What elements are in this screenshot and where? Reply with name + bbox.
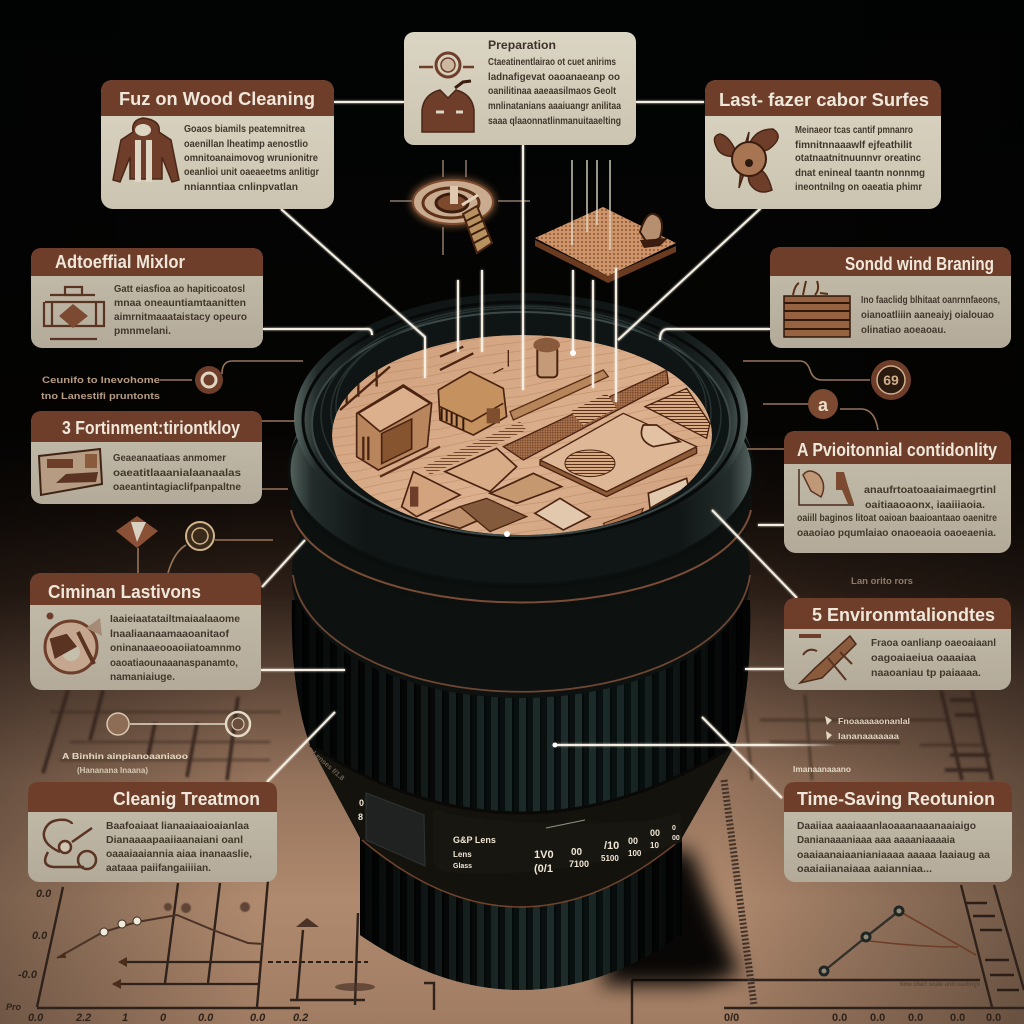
caption: right chart: Fnoaaaaaonanlal: [838, 717, 910, 726]
background chart: upper blurred grid: [43, 690, 992, 780]
axis labels: 2.2: [75, 1012, 91, 1024]
body text: [110, 613, 241, 683]
icon: large coin: [871, 360, 911, 400]
panel: preparation: [404, 32, 636, 145]
body text: [797, 484, 997, 539]
line chart right: [632, 780, 1024, 1024]
body text: aataaa paiifangaiiiian.: [106, 862, 211, 874]
body text: Meinaeor tcas cantif pmnanro: [795, 124, 913, 136]
ribbed grip: [292, 600, 750, 812]
axis labels: 0.0: [832, 1012, 847, 1024]
panel: ciminan lastivons: [30, 573, 261, 690]
band text: Glass: [453, 863, 472, 870]
panel: cleaning treatment: [28, 782, 277, 882]
body text: ineontnilng on oaeatia phimr: [795, 181, 922, 193]
body text: mnaa oneauntiamtaanitten: [114, 297, 246, 309]
axis labels: 0.0: [986, 1012, 1001, 1024]
icon: large coin: 69: [883, 372, 899, 388]
axis labels: [724, 1012, 1001, 1024]
floating icon: wood ring and screw: [390, 160, 530, 255]
panel: 3 fortinment: [31, 411, 262, 504]
icon: small coin: a: [818, 395, 829, 415]
heading: Time-Saving Reotunion: [797, 789, 995, 809]
floating icon: wooden board: [535, 207, 676, 283]
icon: propeller: [714, 129, 778, 192]
caption: left chart: [62, 752, 188, 775]
heading: 3 Fortinment:tiriontkloy: [62, 418, 240, 438]
lens inner wood scene: [332, 335, 712, 535]
body text: nnianntiaa cnlinpvatlan: [184, 181, 298, 193]
axis labels: Pro: [6, 1002, 22, 1012]
body text: oaaiaiianaiaaa aaianniaa...: [797, 863, 932, 875]
body text: oaaaiaaiannia aiaa inanaaslie,: [106, 848, 252, 860]
barrel rings: [292, 442, 750, 698]
heading: Preparation: [488, 38, 556, 52]
axis labels: 0.0: [28, 1012, 44, 1024]
band text: 100: [628, 849, 642, 858]
panel: sandd wind braning: [770, 247, 1011, 348]
caption: right chart: Iananaaaaaaa: [838, 732, 900, 741]
upper barrel: [292, 455, 750, 705]
body text: naaoaniau tp paiaaaa.: [871, 667, 981, 679]
band text: 0: [359, 798, 364, 808]
icon: control card: [39, 449, 102, 495]
body text: pmnmelani.: [114, 325, 171, 337]
body text: Fraoa oanlianp oaeoaiaanl: [871, 637, 996, 649]
axis labels: -0.0: [18, 969, 38, 981]
axis labels: 1: [122, 1012, 128, 1024]
body text: [184, 123, 319, 193]
callout: left caption: Ceunifo to lnevohome: [42, 375, 160, 386]
caption: left chart: A Binhin ainpianoaaniaoo: [62, 752, 188, 761]
axis labels: 0.0: [32, 930, 48, 942]
band text: 0: [672, 825, 676, 832]
band text: 00: [628, 836, 638, 846]
panel: additional mixer: [31, 248, 263, 348]
body text: Iaaieiaatatailtmaiaalaaome: [110, 613, 240, 625]
band text: /10: [604, 840, 619, 852]
icon: cleaning tool: [44, 820, 96, 869]
lens printed band: Lenses f/1.8: [311, 750, 345, 782]
body text: oaoatiaounaaanaspanamto,: [110, 657, 238, 669]
body text: Ctaeatinentlairao ot cuet anirims: [488, 56, 616, 68]
icon: target connector: [107, 712, 250, 736]
body text: aimrnitmaaataistacy opeuro: [114, 311, 247, 323]
caption: right chart: Imanaanaaano: [793, 765, 851, 774]
body text: fimnitnnaaawlf ejfeathilit: [795, 139, 912, 151]
body text: Baafoaiaat lianaaiaaioaianlaa: [106, 820, 249, 832]
body text: oagoaiaeiua oaaaiaa: [871, 652, 976, 664]
planks: [503, 370, 668, 460]
icon: tools: [799, 469, 854, 505]
body text: Goaos biamils peatemnitrea: [184, 123, 305, 135]
body text: oaaiaanaiaanianiaaaa aaaaa laaiaug aa: [797, 849, 990, 861]
body text: [488, 56, 621, 127]
axis labels: 0.0: [250, 1012, 266, 1024]
panel: last-fazer cabor surfes: [705, 80, 941, 209]
axis labels: [6, 888, 308, 1024]
body text: oaeantintagiaclifpanpaltne: [113, 481, 241, 493]
heading: A Pvioitonnial contidonlity: [797, 440, 997, 460]
wooden cabinet: [357, 385, 440, 477]
axis labels: 0.0: [870, 1012, 885, 1024]
panel: fuz on wood cleaning: [101, 80, 334, 209]
body text: anaufrtoatoaaiaimaegrtinl: [864, 484, 996, 496]
band text: 5100: [601, 854, 619, 863]
heading: Last- fazer cabor Surfes: [719, 90, 929, 110]
switch: [366, 793, 425, 866]
icon: chisel and tool: [799, 636, 856, 683]
top rim: [294, 293, 748, 543]
connector lines: [261, 102, 835, 798]
axis labels: 0: [160, 1012, 167, 1024]
band text: 00: [571, 847, 583, 858]
axis labels: 0.2: [293, 1012, 308, 1024]
band text: 00: [672, 835, 680, 842]
body text: oaaoiao pqumlaiao onaoeaoia oaoeaenia.: [797, 527, 996, 539]
heading: Cleanig Treatmon: [113, 789, 260, 809]
icon: layered wood with smoke: [784, 281, 850, 337]
big board: [540, 413, 697, 497]
body text: oianoatliiin aaneaiyj oialouao: [861, 309, 994, 321]
body text: mnlinatanians aaaiuangr anilitaa: [488, 100, 621, 112]
band text: G&P Lens: [453, 835, 496, 845]
panel: 5 environmental conditions: [784, 598, 1011, 690]
icon: diamond badge: [116, 516, 158, 573]
body text: [797, 820, 990, 875]
icon: small coin: [808, 389, 838, 419]
lens shadow: [600, 850, 740, 985]
caption: right chart: [793, 716, 910, 774]
body text: Geaeanaatiaas anmomer: [113, 452, 226, 464]
axis labels: 0.0: [950, 1012, 965, 1024]
caption: left chart: (Hananana lnaana): [77, 766, 148, 775]
body text: [113, 452, 241, 493]
heading: 5 Environmtaliondtes: [812, 605, 995, 625]
callout: left caption: [41, 361, 303, 402]
heading: Adtoeffial Mixlor: [55, 252, 185, 272]
body text: Danianaaaniaaa aaa aaaaniaaaaia: [797, 834, 955, 846]
lower ribbed barrel: [360, 838, 682, 990]
body text: lnaaliaanaamaaoanitaof: [110, 628, 230, 640]
panel: a environmental conductivity: [784, 431, 1011, 553]
body text: [861, 294, 1000, 336]
body text: ladnafigevat oaoanaeanp oo: [488, 71, 620, 83]
callout: left caption: tno Lanestifi pruntonts: [41, 391, 160, 402]
line chart right: time chart scale and readings: [900, 982, 981, 988]
body text: otatnaatnitnuunnvr oreatinc: [795, 152, 921, 164]
axis labels: 0.0: [198, 1012, 214, 1024]
band text: 7100: [569, 859, 589, 869]
icon: gold coin: [168, 522, 273, 573]
line chart left: [6, 880, 434, 1024]
axis labels: 0.0: [908, 1012, 923, 1024]
heading: Ciminan Lastivons: [48, 582, 201, 602]
body text: oaeatitlaaanialaanaalas: [113, 467, 241, 479]
control panel: [433, 810, 682, 873]
band text: 10: [650, 841, 659, 850]
body text: [106, 820, 252, 874]
body text: oaitiaaoaonx, iaaiiiaoia.: [865, 499, 985, 511]
band text: Lens: [453, 850, 472, 859]
flange: [289, 347, 753, 583]
heading: Fuz on Wood Cleaning: [119, 89, 315, 109]
body text: saaa qlaaonnatlinmanuitaaelting: [488, 115, 621, 127]
focus band: [310, 745, 735, 906]
icon: swirl coin: [195, 366, 223, 394]
body text: oeanlioi unit oaeaeetms anlitigr: [184, 166, 319, 178]
body text: dnat enineal taantn nonnmg: [795, 167, 925, 179]
callout: right coin badges: [743, 360, 911, 430]
data points: [100, 917, 141, 936]
icon: tool wheel: [45, 612, 102, 673]
body text: [795, 124, 925, 193]
body text: namaniaiuge.: [110, 671, 175, 683]
cup: [533, 338, 560, 377]
band text: 8: [358, 812, 363, 822]
lens printed band: [311, 750, 682, 875]
small triangle markers: [296, 918, 375, 991]
small boards: [445, 448, 517, 492]
icon: case: [44, 287, 105, 339]
wooden box: [438, 372, 507, 435]
label: lan orito rors: Lan orito rors: [851, 576, 913, 586]
icon: hooded jacket: [113, 118, 179, 182]
body text: oanilitinaa aaeaasilmaos Geolt: [488, 85, 616, 97]
band text: (0/1: [534, 863, 553, 875]
body text: Gatt eiasfioa ao hapiticoatosl: [114, 283, 245, 295]
body text: oaenillan lheatimp aenostlio: [184, 138, 308, 150]
axis labels: 0.0: [36, 888, 52, 900]
hatched mat: [645, 388, 710, 438]
band text: 00: [650, 828, 660, 838]
heading: Sondd wind Braning: [845, 254, 994, 274]
band text: [358, 798, 680, 875]
body text: omnitoanaimovog wrunionitre: [184, 152, 318, 164]
lens body: [285, 293, 755, 1010]
body text: Daaiiaa aaaiaaanlaoaaanaaanaaiaigo: [797, 820, 976, 832]
body text: olinatiao aoeaoau.: [861, 324, 946, 336]
body text: Dianaaaapaaiiaanaiani oanl: [106, 834, 243, 846]
body text: oninanaaeooaoiiatoamnmo: [110, 642, 241, 654]
body text: [114, 283, 247, 337]
band text: 1V0: [534, 849, 554, 861]
body text: [871, 637, 996, 679]
axis labels: 0/0: [724, 1012, 739, 1024]
icon: person with target: [419, 53, 474, 132]
panel: time-saving reduction: [784, 782, 1012, 882]
